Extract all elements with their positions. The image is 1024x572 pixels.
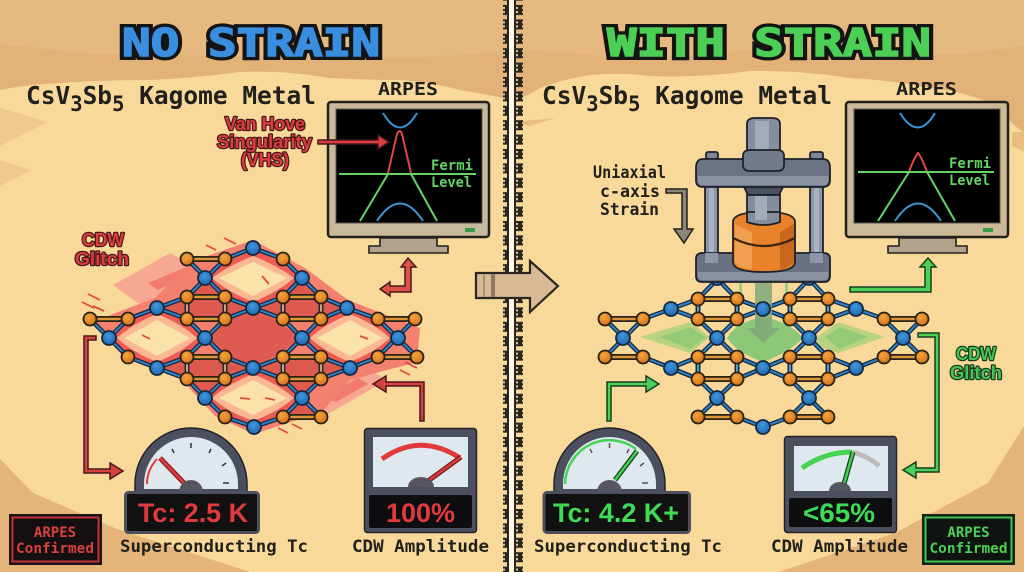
lattice nodes: antimony orange bbox=[84, 252, 424, 424]
label: uniaxial strain: c-axis bbox=[600, 182, 660, 201]
label: Fermi Level: Fermi bbox=[949, 156, 991, 172]
center divider bbox=[503, 0, 523, 572]
label: Fermi Level: Level bbox=[431, 175, 472, 191]
lattice nodes: vanadium blue bbox=[102, 241, 405, 434]
badge: ARPES confirmed right: ARPES bbox=[947, 525, 990, 541]
gauge: left CDW amplitude bbox=[364, 428, 476, 532]
label: uniaxial strain: Strain bbox=[600, 200, 659, 219]
label: CDW amp right: CDW Amplitude bbox=[771, 537, 908, 557]
arrow: lattice to Tc gauge bbox=[84, 336, 123, 479]
label: CDW Glitch left: CDW bbox=[82, 230, 124, 250]
reading: 100% bbox=[386, 498, 455, 528]
label: ARPES: ARPES bbox=[896, 79, 957, 100]
label: uniaxial strain: Uniaxial bbox=[593, 163, 666, 182]
chart: left kagome lattice with CDW bbox=[82, 238, 424, 434]
panel: left ARPES monitor bbox=[328, 79, 489, 253]
heading: left material: CsV bbox=[26, 81, 71, 110]
badge: ARPES confirmed right bbox=[923, 515, 1014, 564]
heading: left material: 5 bbox=[112, 92, 124, 116]
arrow: center transition bbox=[476, 261, 558, 312]
label: CDW Glitch left: Glitch bbox=[75, 249, 129, 269]
heading: right material: CsV bbox=[542, 81, 587, 110]
heading: right material: Kagome Metal bbox=[640, 81, 832, 110]
central CDW cell bbox=[206, 308, 300, 368]
chart: right kagome lattice bbox=[598, 259, 928, 434]
glitch ticks bbox=[82, 238, 417, 433]
label: CDW amp left: CDW Amplitude bbox=[352, 537, 489, 557]
reading: <65% bbox=[803, 498, 875, 528]
arrow: strain direction bbox=[666, 189, 693, 243]
callout: Van Hove Singularity: Singularity bbox=[217, 132, 312, 152]
gauge: right CDW amplitude bbox=[784, 436, 896, 532]
arrow: lattice to monitor, left bbox=[380, 258, 416, 296]
callout: Van Hove Singularity: (VHS) bbox=[241, 150, 289, 170]
arrow: CDW gauge to lattice bbox=[373, 376, 424, 421]
label: Tc left: Superconducting Tc bbox=[120, 537, 308, 557]
badge: ARPES confirmed left: ARPES bbox=[34, 525, 76, 541]
distorted cells bbox=[109, 250, 398, 427]
badge: ARPES confirmed left bbox=[10, 515, 101, 564]
heading: left material: 3 bbox=[70, 92, 83, 116]
gauge: left superconducting Tc bbox=[126, 428, 258, 532]
heading: right material: Sb bbox=[599, 81, 628, 110]
badge: ARPES confirmed right: Confirmed bbox=[930, 541, 1008, 557]
ARPES band curves bbox=[858, 113, 994, 221]
label: CDW Glitch left bbox=[75, 230, 129, 269]
title: no strain: NO STRAIN bbox=[122, 21, 380, 65]
label: Tc right: Superconducting Tc bbox=[534, 537, 722, 557]
callout: Van Hove Singularity bbox=[217, 114, 312, 170]
label: CDW Glitch right: Glitch bbox=[950, 363, 1002, 383]
label: ARPES: ARPES bbox=[378, 79, 438, 100]
badge: ARPES confirmed left: Confirmed bbox=[16, 541, 94, 557]
label: Fermi Level bbox=[431, 158, 473, 191]
lattice bonds bbox=[90, 248, 417, 427]
green relaxed CDW glow bbox=[640, 317, 885, 362]
label: uniaxial strain bbox=[593, 163, 666, 219]
gauge: right superconducting Tc bbox=[544, 428, 690, 532]
arrow: lattice to monitor, right bbox=[850, 258, 936, 292]
lattice nodes: vanadium blue bbox=[616, 271, 910, 434]
callout: Van Hove Singularity: Van Hove bbox=[225, 114, 305, 134]
heading: left material: Kagome Metal bbox=[124, 81, 316, 110]
heading: left material: Sb bbox=[83, 81, 112, 110]
reading: Tc: 4.2 K+ bbox=[553, 498, 679, 528]
ARPES band curves bbox=[339, 113, 476, 221]
label: Fermi Level bbox=[949, 156, 991, 189]
heading: right material: 5 bbox=[628, 92, 640, 116]
label: Fermi Level: Level bbox=[949, 173, 990, 189]
title: with strain: WITH STRAIN bbox=[607, 21, 931, 65]
lattice bonds bbox=[605, 259, 922, 427]
label: CDW Glitch right: CDW bbox=[956, 344, 996, 364]
heading: right material: 3 bbox=[586, 92, 599, 116]
green compression beam bbox=[739, 283, 788, 343]
arrow: Tc gauge to lattice bbox=[607, 376, 659, 421]
label: CDW Glitch right bbox=[950, 344, 1002, 383]
title: no strain: NO STRAIN bbox=[122, 21, 380, 65]
label: Fermi Level: Fermi bbox=[431, 158, 473, 174]
arrow: VHS pointer bbox=[318, 135, 389, 149]
panel: right ARPES monitor bbox=[846, 79, 1008, 253]
icon: uniaxial press bbox=[696, 118, 830, 282]
arrow: lattice to CDW gauge bbox=[903, 333, 939, 478]
reading: Tc: 2.5 K bbox=[138, 498, 248, 528]
lattice nodes: antimony orange bbox=[598, 292, 928, 424]
title: with strain: WITH STRAIN bbox=[607, 21, 931, 65]
